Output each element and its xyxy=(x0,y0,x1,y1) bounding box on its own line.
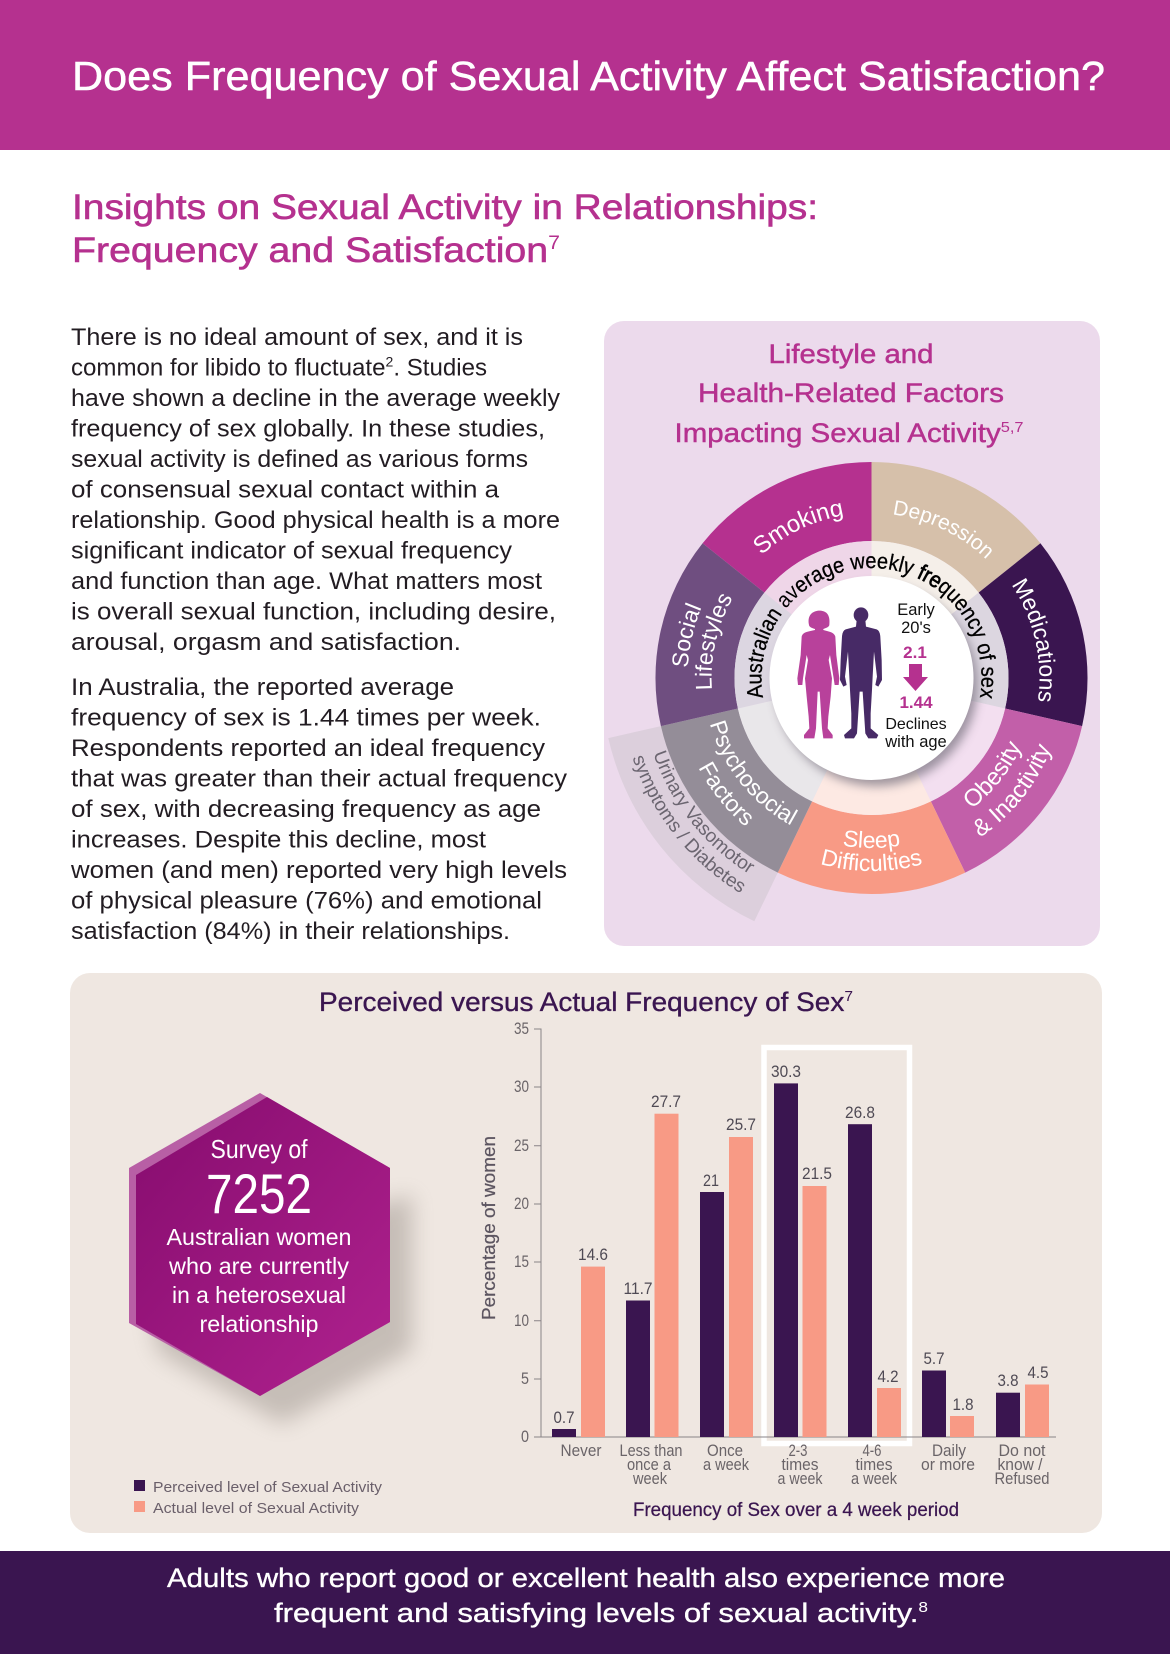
text block: second paragraph: of sex, with decreasing frequency as age xyxy=(71,796,541,823)
text block: second paragraph: In Australia, the reported average xyxy=(71,674,454,701)
perceived bars xyxy=(552,1083,1020,1437)
centre circle xyxy=(770,576,974,780)
text block: second paragraph: increases. Despite this decline, most xyxy=(71,826,486,854)
category labels: Refused xyxy=(994,1470,1050,1488)
y tick labels xyxy=(514,1019,529,1446)
y tick labels: 20 xyxy=(514,1194,529,1213)
text block: second paragraph: that was greater than their actual frequency xyxy=(71,766,567,792)
chart title: Perceived versus Actual Frequency of Sex xyxy=(319,987,826,1017)
segment: sleep difficulties: Difficulties xyxy=(822,849,922,872)
panel heading: lifestyle factors: Impacting Sexual Activity xyxy=(674,418,973,448)
segment: urinary vasomotor symptoms xyxy=(608,726,778,921)
segment: smoking xyxy=(702,462,872,592)
segment: depression xyxy=(872,462,1040,592)
panel: lifestyle and health factors xyxy=(604,321,1100,946)
category labels: a week xyxy=(703,1456,750,1474)
segment: smoking: Smoking xyxy=(754,503,843,552)
x axis title: Frequency of Sex over a 4 week period xyxy=(633,1500,959,1521)
highlight box xyxy=(764,1048,910,1444)
category labels xyxy=(560,1442,1050,1488)
y tick labels: 15 xyxy=(514,1252,529,1271)
category labels: or more xyxy=(921,1456,975,1474)
category labels: 4-6 xyxy=(862,1442,882,1460)
category labels: 2-3 xyxy=(788,1442,808,1460)
footer banner xyxy=(0,1551,1170,1654)
segment: sleep difficulties: Sleep xyxy=(844,830,900,852)
category labels: Less than xyxy=(620,1442,682,1460)
figure: woman silhouette xyxy=(797,611,839,738)
segment: social lifestyles xyxy=(656,543,764,726)
segment: urinary vasomotor symptoms: symptoms / Diabetes xyxy=(632,756,744,892)
text block: first paragraph: sexual activity is defined as various forms xyxy=(71,446,528,473)
category labels: Daily xyxy=(932,1442,967,1460)
hexagon face xyxy=(136,1097,390,1396)
icon: down arrow xyxy=(903,664,928,691)
segment: social lifestyles: Lifestyles xyxy=(694,594,732,689)
hexagon callout: survey: who are currently xyxy=(168,1253,349,1279)
segment: social lifestyles: Social xyxy=(672,602,701,667)
value labels: 4.2 xyxy=(878,1367,898,1386)
bar chart xyxy=(479,1019,1056,1521)
text block: first paragraph: significant indicator of sexual frequency xyxy=(71,538,512,564)
text block: second paragraph: of physical pleasure (76%) and emotional xyxy=(71,888,542,914)
hexagon callout: survey: Australian women xyxy=(166,1224,352,1250)
value labels: 1.8 xyxy=(952,1395,974,1414)
category labels: once a xyxy=(627,1456,672,1474)
legend: Actual level of Sexual Activity xyxy=(153,1500,360,1517)
category labels: Once xyxy=(707,1442,743,1460)
y axis title: Percentage of women xyxy=(479,1136,499,1320)
value labels: 5.7 xyxy=(924,1349,944,1368)
hexagon bevel xyxy=(129,1093,390,1396)
text block: first paragraph: arousal, orgasm and satisfaction. xyxy=(71,629,461,656)
category labels: Never xyxy=(560,1442,602,1460)
category labels: times xyxy=(856,1456,892,1474)
axes xyxy=(534,1029,1056,1437)
section heading: 7 xyxy=(548,233,560,254)
category labels: a week xyxy=(851,1470,898,1488)
value labels: 3.8 xyxy=(998,1371,1018,1390)
hexagon shadow xyxy=(150,1195,412,1424)
text block: first paragraph: common for libido to fluctuate xyxy=(71,354,384,382)
legend: Perceived level of Sexual Activity xyxy=(153,1479,383,1496)
y tick labels: 25 xyxy=(514,1136,529,1155)
segment: medications xyxy=(978,543,1088,726)
centre stats: decline with age: 2.1 xyxy=(903,643,927,662)
value labels: 26.8 xyxy=(845,1103,875,1122)
legend xyxy=(134,1479,383,1517)
footer banner: 8 xyxy=(918,1599,928,1616)
text block: second paragraph: frequency of sex is 1.44 times per week. xyxy=(71,704,541,732)
actual bars xyxy=(581,1114,1049,1437)
category labels: week xyxy=(632,1470,668,1488)
value labels: 21 xyxy=(703,1171,719,1190)
inner ring tints xyxy=(734,541,1009,815)
text block: first paragraph: relationship. Good physical health is a more xyxy=(71,507,560,534)
panel heading: lifestyle factors: Lifestyle and xyxy=(768,339,934,369)
title: Does Frequency of Sexual Activity Affect Satisfaction? xyxy=(72,53,1105,99)
value labels: 11.7 xyxy=(624,1279,652,1298)
section heading xyxy=(72,188,818,270)
text block: first paragraph: . Studies xyxy=(393,354,487,382)
panel heading: lifestyle factors xyxy=(674,339,1023,448)
text block: second paragraph: Respondents reported an ideal frequency xyxy=(71,735,545,762)
text block: first paragraph: and function than age. What matters most xyxy=(71,568,542,595)
ring text: Australian average weekly frequency of sex: Australian average weekly frequency of sex xyxy=(746,554,996,699)
y tick labels: 10 xyxy=(514,1311,529,1330)
category labels: Do not xyxy=(998,1442,1046,1460)
header banner xyxy=(0,0,1170,150)
value labels: 4.5 xyxy=(1028,1363,1048,1382)
centre stats: decline with age xyxy=(884,601,947,751)
segment: obesity and inactivity: & Inactivity xyxy=(974,743,1052,836)
text block: first paragraph: 2 xyxy=(385,354,394,370)
segment: psychosocial factors: Factors xyxy=(699,761,752,826)
y tick labels: 30 xyxy=(514,1077,529,1096)
centre stats: decline with age: Early xyxy=(897,601,936,619)
panel heading: lifestyle factors: Health-Related Factors xyxy=(698,378,1004,408)
value labels: 21.5 xyxy=(802,1164,832,1183)
value labels xyxy=(554,1062,1048,1427)
text block: first paragraph: is overall sexual function, including desire, xyxy=(71,598,556,626)
value labels: 25.7 xyxy=(726,1115,756,1134)
panel heading: lifestyle factors: 5,7 xyxy=(1001,419,1023,436)
value labels: 30.3 xyxy=(771,1062,801,1081)
category labels: know / xyxy=(998,1456,1043,1474)
centre stats: decline with age: 20's xyxy=(901,619,931,637)
category labels: times xyxy=(782,1456,818,1474)
hexagon callout: survey xyxy=(129,1093,412,1424)
segment: obesity and inactivity xyxy=(931,708,1082,873)
text block: second paragraph: women (and men) reported very high levels xyxy=(70,857,567,884)
segment: sleep difficulties xyxy=(778,802,966,894)
segment: psychosocial factors xyxy=(661,708,812,872)
text block: first paragraph xyxy=(71,324,560,656)
text block: second paragraph xyxy=(70,674,567,945)
chart title: 7 xyxy=(844,988,853,1005)
centre stats: decline with age: Declines xyxy=(885,716,947,733)
segment: psychosocial factors: Psychosocial xyxy=(710,720,798,825)
segment: obesity and inactivity: Obesity xyxy=(964,740,1022,806)
text block: first paragraph: have shown a decline in the average weekly xyxy=(71,385,560,412)
footer message: Adults who report good or excellent health also experience more xyxy=(167,1563,1005,1593)
segment: urinary vasomotor symptoms: Urinary Vasomotor xyxy=(654,750,754,872)
centre stats: decline with age: with age xyxy=(884,733,947,751)
y tick labels: 0 xyxy=(521,1427,529,1446)
text block: first paragraph: frequency of sex globally. In these studies, xyxy=(71,416,545,442)
category labels: a week xyxy=(778,1470,823,1488)
factor wheel xyxy=(608,462,1088,921)
section heading: Frequency and Satisfaction xyxy=(72,231,496,270)
hexagon callout: survey: Survey of xyxy=(210,1134,308,1164)
hexagon callout: survey: 7252 xyxy=(206,1162,312,1225)
centre stats: decline with age: 1.44 xyxy=(899,693,933,712)
centre circle shadow xyxy=(776,584,978,786)
section heading: Insights on Sexual Activity in Relationships: xyxy=(72,188,818,227)
segment: medications: Medications xyxy=(1012,578,1056,702)
footer banner: frequent and satisfying levels of sexual activity. xyxy=(274,1598,833,1628)
value labels: 14.6 xyxy=(578,1245,608,1264)
segment: depression: Depression xyxy=(894,500,992,559)
y tick labels: 5 xyxy=(521,1369,529,1388)
value labels: 27.7 xyxy=(651,1092,681,1111)
value labels: 0.7 xyxy=(554,1408,574,1427)
panel: perceived versus actual xyxy=(70,973,1102,1533)
text block: second paragraph: satisfaction (84%) in their relationships. xyxy=(71,918,510,945)
figure: man silhouette xyxy=(840,607,882,738)
hexagon callout: survey: relationship xyxy=(200,1311,318,1337)
hexagon callout: survey: in a heterosexual xyxy=(172,1282,346,1308)
text block: first paragraph: There is no ideal amount of sex, and it is xyxy=(71,324,523,351)
text block: first paragraph: of consensual sexual contact within a xyxy=(71,476,500,504)
y tick labels: 35 xyxy=(514,1019,529,1038)
